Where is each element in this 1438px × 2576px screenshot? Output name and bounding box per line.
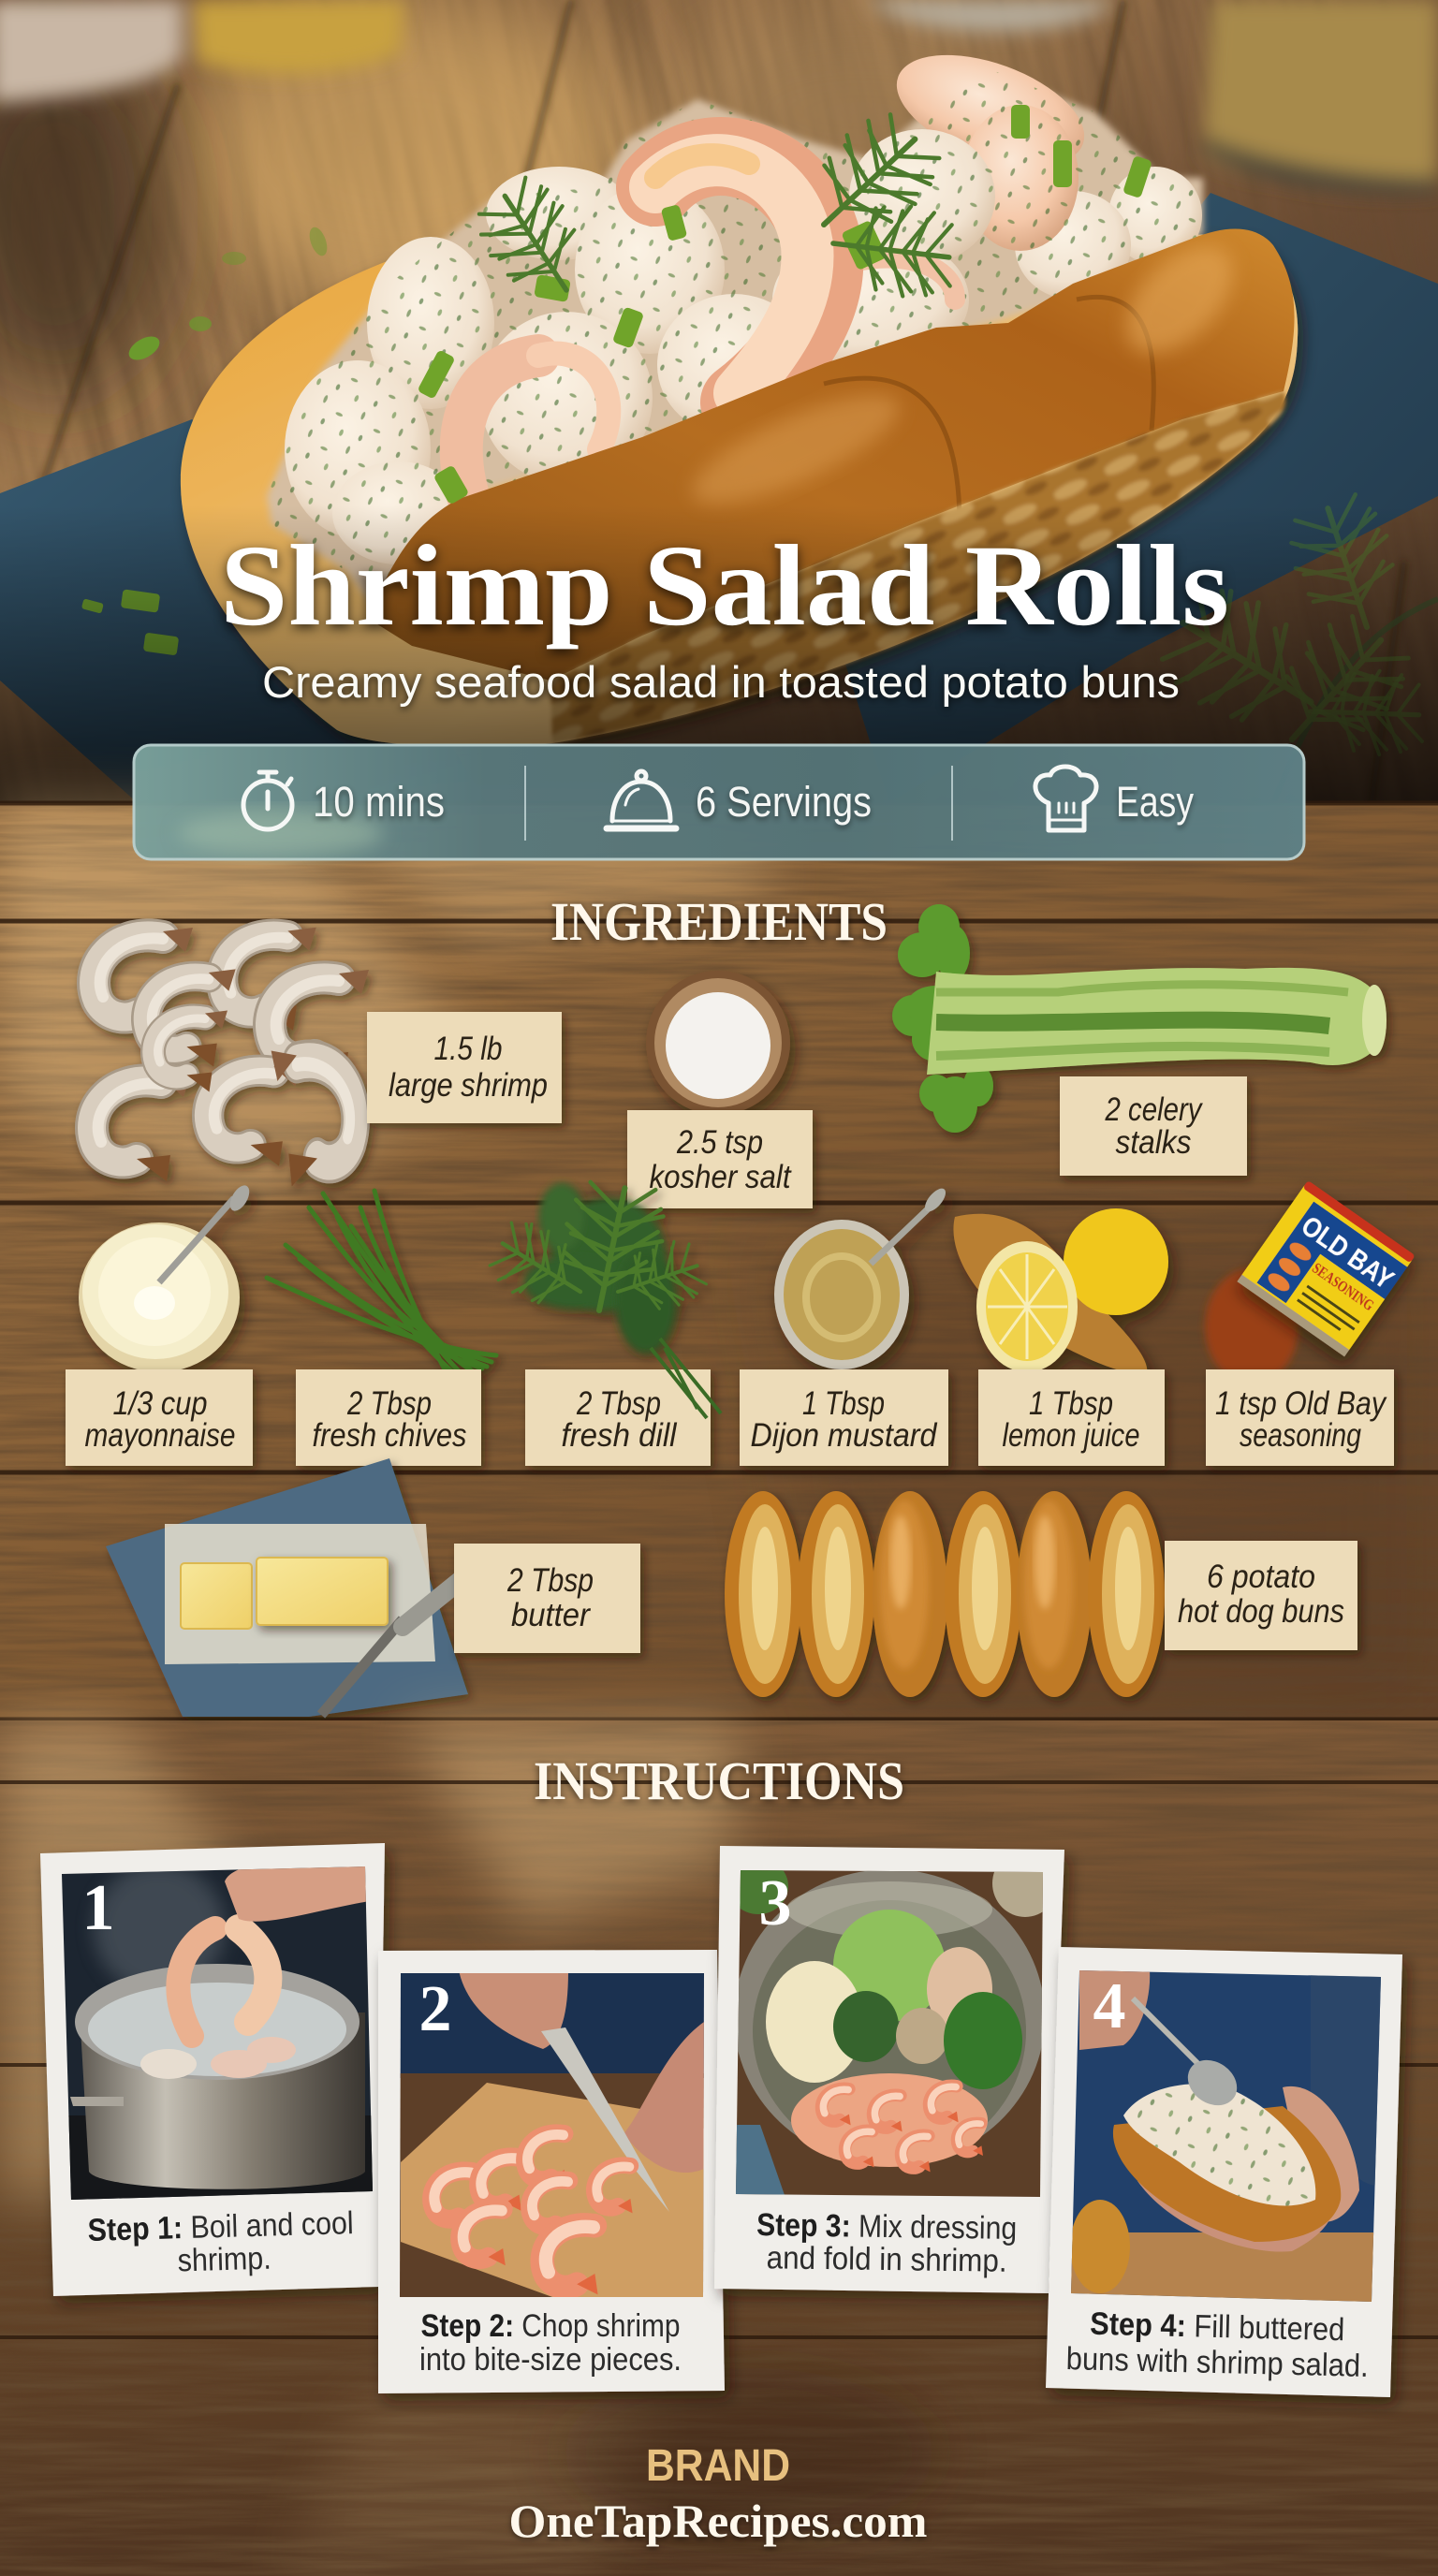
photo: boiling pot [56, 1863, 374, 2209]
blue napkin [0, 193, 1438, 803]
label: mayonnaise: mayonnaise [84, 1417, 236, 1454]
icon: spilled seasoning [1205, 1268, 1299, 1384]
label: shrimp: large shrimp [389, 1067, 548, 1104]
label: butter [454, 1544, 640, 1653]
icon: cloche [607, 771, 676, 828]
icon: dijon bowl [774, 1185, 949, 1369]
toasted cut side [550, 391, 1285, 743]
stat: time: 10 mins [313, 778, 445, 826]
label: old bay: 1 tsp Old Bay [1215, 1385, 1387, 1422]
label: celery: stalks [1116, 1124, 1191, 1161]
label: lemon juice: lemon juice [1002, 1417, 1140, 1454]
label: salt [627, 1110, 813, 1208]
label: old bay [1206, 1369, 1394, 1466]
icon: mayonnaise jar [79, 1182, 253, 1372]
blurred background dishes [0, 0, 1438, 193]
step card 2 [378, 1950, 725, 2393]
label: salt: 2.5 tsp [676, 1124, 763, 1161]
shrimp salad roll [181, 33, 1298, 746]
step 2 caption: Step 2: Chop shrimp [421, 2308, 680, 2344]
label: lemon juice: 1 Tbsp [1029, 1385, 1113, 1422]
tin seasoning word: SEASONING [1309, 1259, 1377, 1314]
step number 4: 4 [1093, 1970, 1125, 2042]
step 4 caption: Step 4: Fill buttered [1090, 2306, 1345, 2348]
step number 3: 3 [758, 1867, 792, 1939]
icon: potato buns [725, 1491, 1165, 1697]
stat: servings: 6 Servings [696, 778, 872, 826]
hero text shade [0, 505, 1438, 803]
scattered chives [81, 225, 330, 655]
bun body [181, 232, 1298, 746]
label: shrimp [367, 1012, 562, 1123]
label: lemon juice [978, 1369, 1165, 1466]
panel: hero [0, 0, 1438, 803]
step 3 caption line 2: and fold in shrimp. [766, 2240, 1007, 2279]
icon: butter on napkin [106, 1458, 476, 1717]
label: dill [525, 1369, 711, 1466]
icon: chef hat [1035, 767, 1096, 830]
subtitle: Creamy seafood salad in toasted potato buns [262, 657, 1180, 707]
icon: dill bunch [478, 1153, 717, 1353]
stats bar [134, 745, 1304, 859]
label: chives: fresh chives [313, 1417, 466, 1454]
icon: lemons on wooden spoon [953, 1208, 1168, 1376]
icon: salt bowl [646, 971, 790, 1115]
label: buns [1165, 1541, 1357, 1650]
heading: ingredients: INGREDIENTS [550, 891, 888, 952]
hero wood background [0, 0, 1438, 801]
step 2 caption line 2: into bite-size pieces. [419, 2342, 682, 2378]
tin brand name: OLD BAY [1296, 1210, 1399, 1295]
step card 4 [1046, 1947, 1402, 2397]
step number 1: 1 [82, 1872, 114, 1944]
chive bits [413, 105, 1152, 642]
label: buns: hot dog buns [1178, 1593, 1344, 1630]
filling [267, 70, 1203, 608]
dill sprigs [473, 174, 579, 290]
title: Shrimp Salad Rolls [220, 521, 1229, 650]
dill sprig, dark [1144, 478, 1438, 803]
label: celery: 2 celery [1105, 1091, 1204, 1128]
label: dijon: Dijon mustard [751, 1417, 938, 1454]
step 1 caption: Step 1: Boil and cool [87, 2205, 354, 2248]
photo: filling bun [1067, 1966, 1386, 2307]
step 1 caption line 2: shrimp. [177, 2241, 271, 2278]
label: mayonnaise: 1/3 cup [112, 1385, 208, 1422]
label: dill: 2 Tbsp [576, 1385, 661, 1422]
photo: chopping shrimp [393, 1966, 712, 2303]
label: chives: 2 Tbsp [346, 1385, 432, 1422]
label: mayonnaise [66, 1369, 253, 1466]
dill stems over label [651, 1339, 721, 1418]
icon: raw shrimp pile [92, 928, 369, 1187]
step card 3 [714, 1846, 1064, 2293]
stat: difficulty: Easy [1116, 778, 1194, 826]
icon: celery [892, 904, 1387, 1133]
label: shrimp: 1.5 lb [434, 1031, 502, 1067]
label: celery [1060, 1076, 1247, 1176]
label: old bay: seasoning [1240, 1417, 1361, 1454]
label: butter: 2 Tbsp [506, 1562, 594, 1599]
panel: instructions background [0, 1720, 1438, 2576]
step 4 caption line 2: buns with shrimp salad. [1065, 2341, 1369, 2384]
label: dijon: 1 Tbsp [802, 1385, 885, 1422]
step 3 caption: Step 3: Mix dressing [756, 2207, 1017, 2247]
photo: mixing bowl [728, 1850, 1058, 2204]
label: buns: 6 potato [1207, 1559, 1315, 1595]
icon: chives [267, 1191, 496, 1395]
panel: ingredients background [0, 803, 1438, 1722]
heading: instructions: INSTRUCTIONS [534, 1750, 904, 1811]
crust [367, 229, 1295, 681]
website: OneTapRecipes.com [509, 2495, 927, 2547]
label: dijon [740, 1369, 948, 1466]
step card 1 [40, 1843, 385, 2296]
icon: timer [243, 772, 292, 829]
step number 2: 2 [419, 1973, 451, 2045]
label: salt: kosher salt [650, 1159, 792, 1195]
icon: old bay tin [1237, 1180, 1416, 1356]
label: butter: butter [511, 1597, 591, 1633]
label: chives [296, 1369, 481, 1466]
brand label: BRAND [646, 2441, 790, 2491]
label: dill: fresh dill [562, 1417, 678, 1454]
